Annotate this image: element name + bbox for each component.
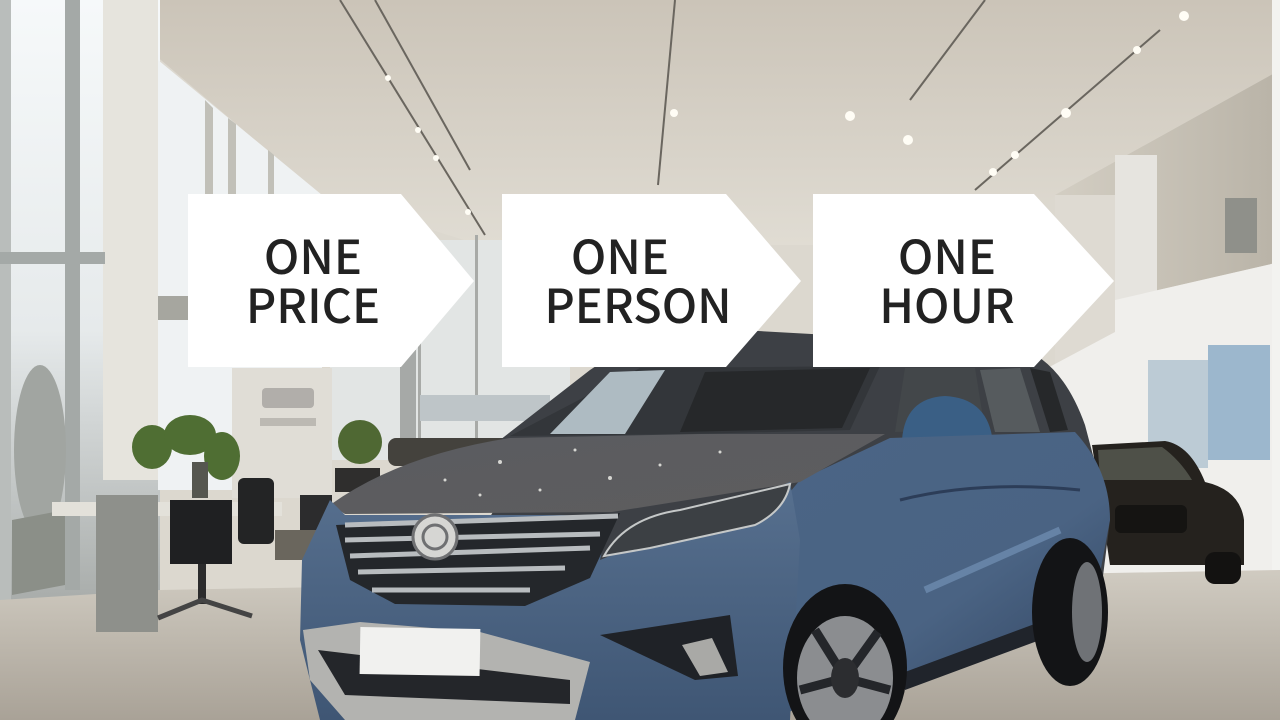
office area with plants, desk and chairs: [52, 415, 518, 632]
right balcony and lower wall: [1040, 262, 1280, 600]
side body: [700, 432, 1110, 720]
label: one price: ONE: [264, 219, 362, 288]
back sign wall: [232, 368, 332, 498]
front bumper: [300, 482, 800, 720]
arrow: one hour: [813, 194, 1114, 367]
label: one person: ONE: [571, 219, 669, 288]
side windows: [895, 368, 985, 432]
left glass wall: [0, 0, 160, 600]
label: one person: PERSON: [544, 268, 732, 337]
label: one hour: HOUR: [879, 268, 1015, 337]
bumper silver skid: [303, 622, 590, 720]
side mirror: [902, 396, 992, 440]
ceiling track lights: [340, 0, 1189, 235]
right upper wall: [1055, 70, 1280, 300]
arrow: one person: [502, 194, 801, 367]
badge: [413, 515, 457, 559]
label: one hour: ONE: [898, 219, 996, 288]
roof and cabin: [370, 330, 1110, 720]
arrow: one price: [188, 194, 474, 367]
back windows: [330, 240, 570, 460]
background dark car: [1092, 441, 1244, 584]
ceiling: [155, 0, 1280, 245]
licence plate: [360, 627, 480, 676]
label: one price: PRICE: [246, 268, 380, 337]
main blue SUV: [300, 330, 1110, 720]
lower grille: [318, 650, 570, 704]
rear wheel: [1032, 538, 1108, 686]
fog vent: [600, 615, 738, 680]
headlight: [604, 484, 790, 556]
windscreen: [510, 366, 880, 436]
front wheel: [783, 584, 907, 720]
grille: [336, 513, 620, 606]
floor: [0, 570, 1280, 720]
hood: [330, 434, 885, 514]
